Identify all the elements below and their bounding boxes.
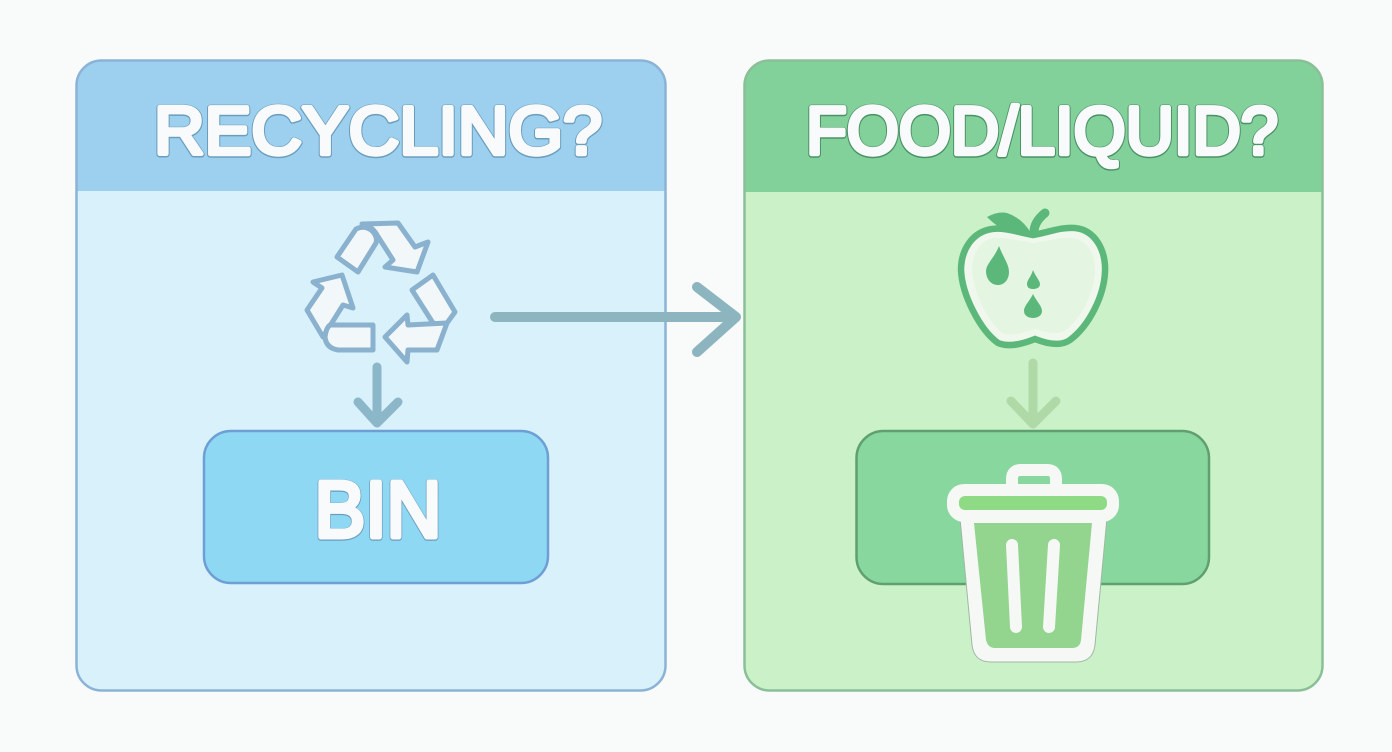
box: green bin label xyxy=(856,431,1209,584)
heading: RECYCLING?: RECYCLING? xyxy=(154,93,602,169)
box: BIN: BIN xyxy=(314,466,442,554)
panel header: food or liquid xyxy=(744,60,1322,192)
panel header: recycling xyxy=(76,60,666,191)
arrow: recycling to food or liquid xyxy=(495,287,736,352)
icon: trash bin xyxy=(947,470,1119,662)
icon: apple with drops xyxy=(961,212,1105,345)
heading: RECYCLING?: RECYCLING? xyxy=(154,94,602,170)
arrow: apple to trash bin xyxy=(1011,363,1056,424)
arrow: recycling symbol to bin xyxy=(358,367,398,423)
icon: recycling symbol xyxy=(307,223,455,362)
box: BIN xyxy=(204,431,548,583)
heading: FOOD/LIQUID?: FOOD/LIQUID? xyxy=(806,93,1278,169)
box: BIN: BIN xyxy=(314,465,442,554)
panel: food or liquid xyxy=(744,60,1322,690)
panel: recycling xyxy=(76,60,666,690)
heading: FOOD/LIQUID?: FOOD/LIQUID? xyxy=(806,94,1278,170)
